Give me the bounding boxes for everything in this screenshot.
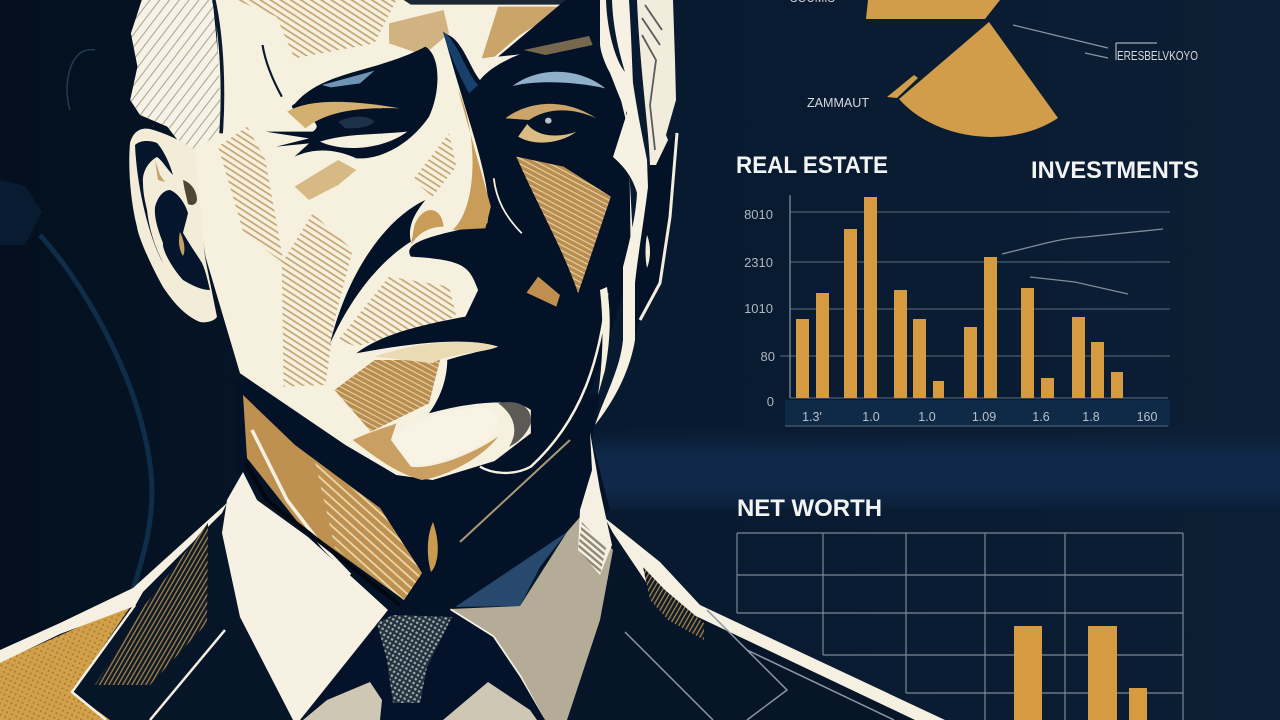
hair divider stroke (214, 0, 222, 133)
under-eye hatch (295, 160, 356, 200)
right eye gold band (505, 104, 596, 120)
collar shadow edge (245, 462, 400, 605)
y axis labels: 2310 (744, 255, 773, 270)
x axis labels: 1.0 (862, 410, 880, 424)
small gold accent (527, 277, 560, 307)
head in local coordinates (130, 0, 633, 480)
x axis labels: 160 (1137, 410, 1157, 424)
right brow band (524, 36, 593, 55)
forehead hatch upper (236, 0, 396, 58)
nose gold shading (453, 90, 491, 230)
right brow highlight (513, 72, 605, 88)
horizontal navy band (590, 425, 1280, 510)
jaw white contour (480, 293, 607, 473)
x axis labels: 1.6 (1032, 410, 1050, 424)
left lapel hatch (95, 523, 208, 685)
left shoulder trim (0, 503, 227, 663)
mid cheek hatch (338, 277, 456, 347)
neck dark (235, 380, 610, 620)
tie surround (300, 610, 545, 720)
y axis labels: 0 (767, 394, 774, 409)
pie chart (790, 0, 1198, 137)
ear gold detail (155, 160, 184, 256)
right hair (595, 0, 677, 425)
pie label right (1116, 43, 1198, 63)
face base (191, 0, 633, 480)
nose side hatch (413, 133, 456, 197)
net worth chart (737, 533, 1183, 720)
heading: investments: INVESTMENTS (1031, 157, 1199, 184)
right hair outline (640, 133, 677, 320)
right lapel hatch (643, 567, 704, 640)
sideburn cream (598, 287, 610, 395)
collar hatch (578, 522, 606, 575)
x axis labels: 1.09 (972, 410, 996, 424)
x axis labels: 1.0 (918, 410, 936, 424)
nasolabial fold (330, 200, 425, 343)
forehead wrinkle (263, 45, 282, 97)
neck gold sliver (428, 522, 438, 572)
right hair interior shadow (630, 133, 677, 345)
right hair sliver (646, 235, 650, 268)
left eye iris lines (338, 117, 375, 128)
top headband sliver (404, 0, 565, 5)
pie leader lines (1013, 25, 1108, 58)
chin gold shade (353, 423, 498, 480)
nose highlight line (494, 178, 522, 233)
left eye shadow (265, 47, 437, 158)
ear hair tuft (183, 180, 197, 205)
left collar (222, 472, 388, 720)
cheek shadow stroke (560, 163, 625, 203)
x axis labels: 1.8 (1082, 410, 1100, 424)
right jacket (545, 518, 945, 720)
heading: net worth: NET WORTH (737, 495, 882, 522)
lower cheek hatch (335, 360, 440, 432)
main face shadow (356, 33, 631, 467)
pie slice main (899, 22, 1058, 137)
chart x-axis band (785, 400, 1170, 426)
neck gold stripes (315, 462, 422, 600)
ear (129, 129, 217, 322)
left eyelid gold (287, 102, 400, 128)
forehead gold patch (389, 10, 449, 55)
ear canal (155, 190, 210, 290)
temple hatch (218, 127, 284, 263)
ear outer (129, 129, 217, 322)
right hair feather strokes (642, 5, 662, 150)
neck and shirt collar (0, 380, 945, 720)
jacket left side (72, 500, 300, 720)
right collar (450, 517, 613, 720)
trend lines (1002, 229, 1163, 294)
upper lip highlight (375, 342, 498, 363)
neck cream line (252, 430, 350, 575)
y axis labels: 80 (761, 349, 775, 364)
brow gold triangle (482, 7, 565, 58)
tie knot mesh (377, 615, 452, 703)
bar chart: real estate (744, 195, 1170, 426)
y axis labels: 8010 (744, 207, 773, 222)
right eye lower crescent (518, 124, 576, 143)
heading: real estate: REAL ESTATE (736, 152, 888, 179)
pie label left: ZAMMAUT (807, 95, 869, 110)
net worth bars (1014, 626, 1147, 720)
neck gold band (243, 395, 422, 600)
collar blue facet (455, 532, 567, 607)
left hair (130, 0, 225, 160)
net worth grid (737, 533, 1183, 720)
chin highlight (393, 408, 497, 465)
nose bridge blue (443, 32, 478, 93)
left brow highlight (322, 71, 375, 87)
chart grid lines (780, 195, 1170, 426)
right hair main strip (595, 0, 648, 425)
right shoulder trim (605, 518, 945, 720)
right eye pupil (545, 118, 552, 124)
pie label right: ERESBELVKOYO (1117, 48, 1198, 63)
chin grey shade (498, 402, 531, 447)
pie slice top (866, 0, 1000, 19)
shirt below tie (303, 682, 537, 720)
right collar white edge (450, 610, 543, 720)
ear helix shadow (135, 141, 173, 263)
x axis labels: 1.3' (802, 410, 822, 424)
right collar cream strip (578, 432, 612, 575)
cheek hatch (282, 213, 353, 387)
left eye cream (320, 132, 407, 148)
pie sliver (887, 75, 918, 98)
bars (796, 197, 1123, 398)
top right shadow (498, 0, 607, 57)
nose wing gold (411, 210, 444, 245)
right hair feather (637, 0, 676, 165)
right cheek gold hatch (516, 157, 611, 293)
y axis labels (744, 207, 775, 409)
left lapel outline (72, 605, 225, 720)
portrait illustration (0, 0, 945, 720)
background decorative curve (0, 50, 152, 590)
neck thin tan line (460, 440, 570, 542)
x axis labels (802, 410, 1157, 424)
right lapel outline (625, 610, 894, 720)
right hair dark streak (606, 0, 625, 72)
shoulder gold patch (0, 603, 133, 720)
y axis labels: 1010 (744, 301, 773, 316)
